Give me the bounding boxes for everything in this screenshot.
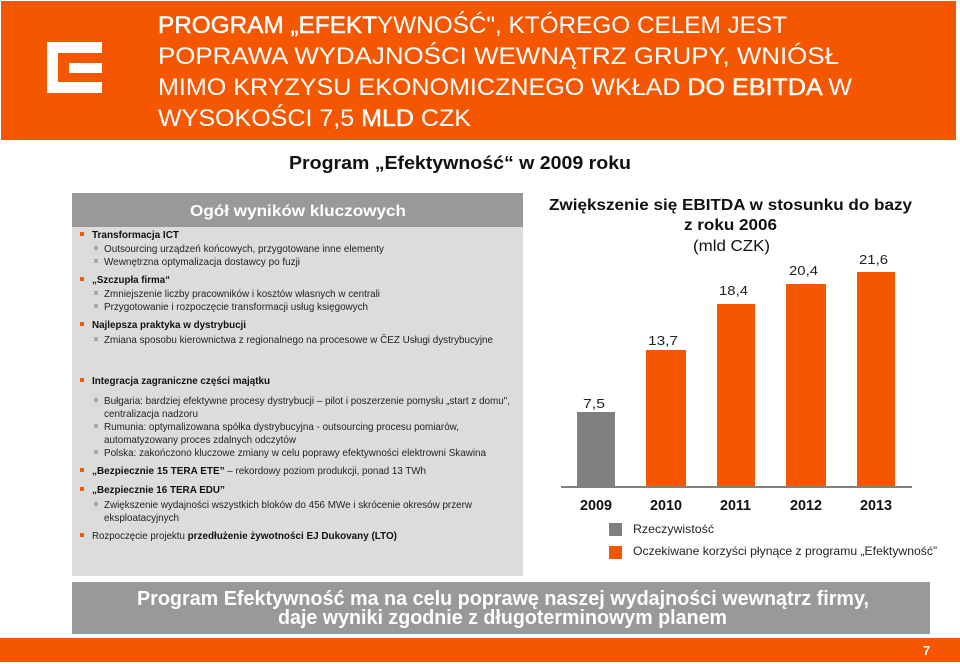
bar chart [561, 252, 912, 514]
icon: CEZ logo [47, 42, 102, 93]
text block: lean company: „Szczupła firma“ [92, 275, 170, 286]
header title: MIMO KRYZYSU EKONOMICZNEGO WKŁAD DO EBITDA W [158, 74, 852, 101]
text block: best practice [92, 320, 493, 346]
text block: ICT transformation: Transformacja ICT [92, 230, 180, 241]
year axis labels: 2009 [580, 498, 612, 514]
text block: foreign integration: Rumunia: optymalizowana spółka dystrybucyjna - outsourcing procesu pomiarów, [104, 422, 459, 433]
text block: ICT transformation: Outsourcing urządzeń końcowych, przygotowane inne elementy [104, 244, 385, 255]
year axis labels: 2011 [720, 498, 751, 514]
footer bar with page number [0, 638, 960, 662]
header title: WYSOKOŚCI 7,5 MLD CZK [158, 104, 471, 132]
year axis labels: 2012 [790, 498, 822, 514]
text block: safe 16 TERA [92, 485, 473, 524]
year axis labels: 2013 [860, 498, 892, 514]
text block: foreign integration: automatyzowany proces zdalnych odczytów [104, 435, 297, 446]
legend: Oczekiwane korzyści płynące z programu „Efektywność” [633, 544, 937, 558]
conclusion bar: Program Efektywność ma na celu poprawę naszej wydajności wewnątrz firmy, [137, 588, 869, 610]
panel heading: Ogół wyników kluczowych [190, 203, 406, 220]
legend: Rzeczywistość [633, 522, 714, 536]
bar values: 21,6 [859, 252, 888, 267]
text block: safe 16 TERA: Zwiększenie wydajności wszystkich bloków do 456 MWe i skrócenie okresów przerw [104, 500, 473, 511]
header title: PROGRAM „EFEKTYWNOŚĆ", KTÓREGO CELEM JEST [158, 11, 787, 39]
main heading: Program „Efektywność“ w 2009 roku [289, 153, 631, 173]
chart title: (mld CZK) [693, 238, 770, 255]
text block: lean company [92, 275, 380, 313]
chart title: z roku 2006 [684, 217, 777, 234]
footer bar with page number: 7 [923, 643, 930, 658]
header title [158, 11, 852, 132]
text block: best practice: Zmiana sposobu kierownictwa z regionalnego na procesowe w ČEZ Usługi dystrybucyjne [104, 333, 493, 346]
text block: best practice: Najlepsza praktyka w dystrybucji [92, 320, 246, 331]
text block: foreign integration: Integracja zagraniczne części majątku [92, 376, 270, 387]
conclusion bar: daje wyniki zgodnie z długoterminowym planem [278, 607, 727, 629]
bar values [583, 252, 888, 411]
legend [609, 522, 937, 559]
text block: lean company: Zmniejszenie liczby pracowników i kosztów własnych w centrali [104, 289, 380, 300]
text block: foreign integration: centralizacja nadzoru [104, 409, 198, 420]
year axis labels: 2010 [650, 498, 682, 514]
text block: ICT transformation [92, 230, 385, 268]
text block: safe 16 TERA: „Bezpiecznie 16 TERA EDU” [92, 485, 225, 496]
bar values: 13,7 [648, 333, 678, 348]
text block: safe 15 TERA: „Bezpiecznie 15 TERA ETE” – rekordowy poziom produkcji, ponad 13 TWh [92, 466, 426, 477]
panel: key results [72, 193, 523, 576]
text block: foreign integration [92, 376, 510, 459]
chart title: Zwiększenie się EBITDA w stosunku do bazy [549, 197, 912, 214]
text block: foreign integration: Bułgaria: bardziej efektywne procesy dystrybucji – pilot i poszerzenie pomysłu „start z domu", [104, 396, 510, 407]
text block: lean company: Przygotowanie i rozpoczęcie transformacji usług księgowych [104, 302, 368, 313]
bar values: 20,4 [789, 263, 818, 278]
text block: LTO project: Rozpoczęcie projektu przedłużenie żywotności EJ Dukovany (LTO) [92, 531, 397, 542]
conclusion bar [72, 582, 930, 634]
bar values: 18,4 [719, 283, 748, 298]
header title: POPRAWA WYDAJNOŚCI WEWNĄTRZ GRUPY, WNIÓSŁ [158, 42, 839, 70]
text block: ICT transformation: Wewnętrzna optymalizacja dostawcy po fuzji [104, 257, 300, 268]
bar values: 7,5 [583, 396, 605, 411]
text block: foreign integration: Polska: zakończono kluczowe zmiany w celu poprawy efektywności elektrowni Skawina [104, 448, 486, 459]
header banner [1, 1, 956, 140]
chart title [549, 197, 912, 255]
text block: safe 16 TERA: eksploatacyjnych [104, 513, 179, 524]
year axis labels [580, 498, 892, 514]
bullet markers [80, 232, 84, 537]
